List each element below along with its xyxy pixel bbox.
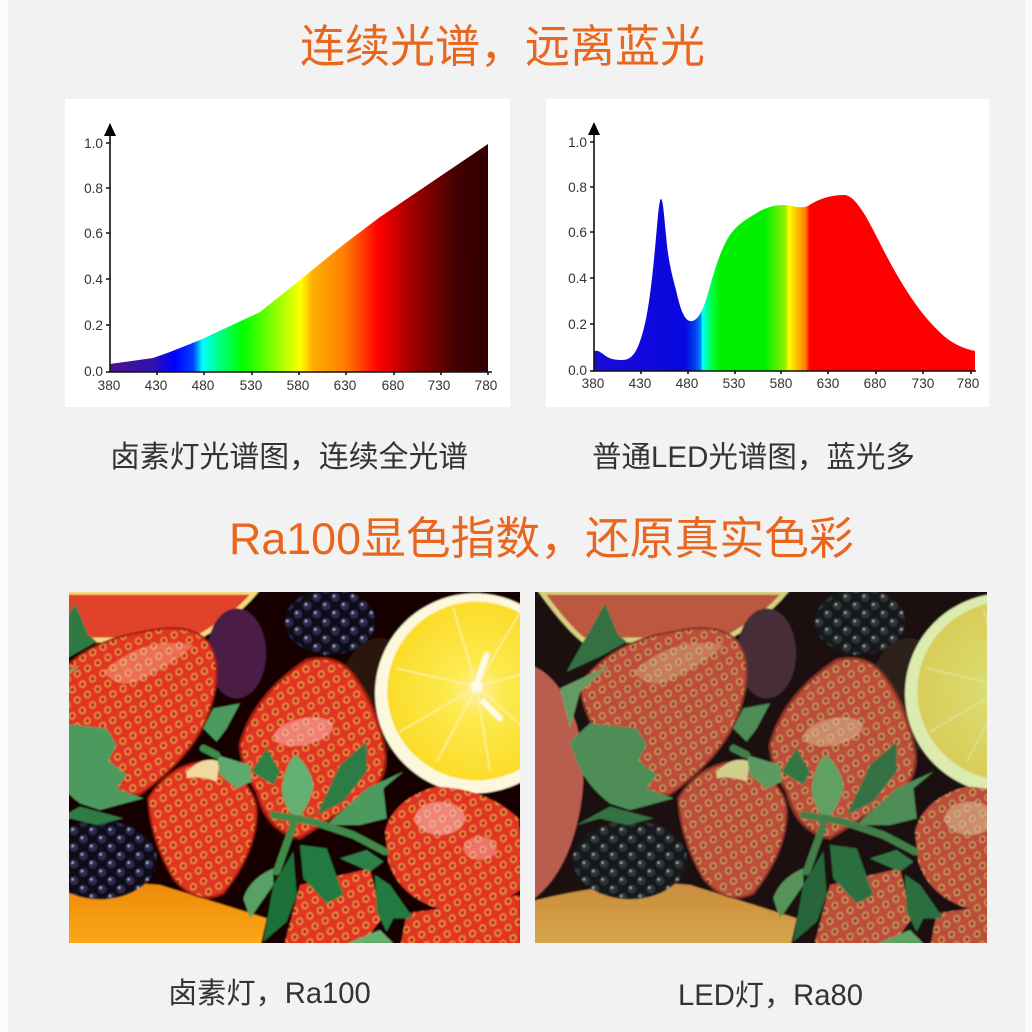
photo: LED lit fruit [535, 592, 987, 943]
y axis labels: 1.0 [568, 135, 587, 150]
x axis labels: 780 [957, 376, 980, 391]
LED spectrum area [594, 195, 975, 371]
plum [207, 608, 266, 698]
y axis labels: 0.8 [568, 180, 587, 195]
x axis labels: 680 [382, 378, 405, 393]
y axis labels: 0.6 [84, 226, 103, 241]
caption: halogen spectrum: 卤素灯光谱图，连续全光谱 [110, 441, 468, 474]
y axis labels: 1.0 [84, 136, 103, 151]
x axis labels: 530 [240, 378, 263, 393]
x axis labels [98, 378, 498, 393]
heading: Ra100 colour rendering: Ra100显色指数，还原真实色彩 [229, 514, 854, 564]
lemon [375, 593, 575, 793]
y axis labels: 0.4 [84, 272, 103, 287]
arrow: y axis [588, 122, 600, 135]
x axis labels: 630 [334, 378, 357, 393]
x axis labels: 430 [145, 378, 168, 393]
x axis labels: 580 [287, 378, 310, 393]
x axis labels: 580 [770, 376, 793, 391]
caption: LED Ra80: LED灯，Ra80 [678, 980, 863, 1012]
x axis labels: 730 [912, 376, 935, 391]
axes [106, 130, 492, 375]
axes [590, 128, 976, 374]
x axis labels: 680 [864, 376, 887, 391]
y axis labels: 0.0 [84, 364, 103, 379]
x axis labels: 480 [676, 376, 699, 391]
strawberry right [385, 787, 527, 910]
grapefruit [12, 592, 255, 640]
strawberry lower-right [283, 868, 382, 948]
x axis labels: 630 [817, 376, 840, 391]
panel: LED spectrum chart [546, 99, 989, 407]
y axis labels [84, 136, 103, 379]
caption: LED spectrum: 普通LED光谱图，蓝光多 [592, 441, 915, 474]
y axis labels: 0.4 [568, 271, 587, 286]
x axis labels: 480 [192, 378, 215, 393]
arrow: y axis [104, 123, 116, 136]
caption: halogen Ra100: 卤素灯，Ra100 [168, 978, 371, 1010]
strawberry center-lower [148, 761, 257, 898]
y axis labels [568, 135, 587, 378]
y axis labels: 0.6 [568, 225, 587, 240]
stems [203, 748, 385, 872]
y axis labels: 0.2 [568, 317, 587, 332]
blackberry top [285, 589, 375, 654]
y axis labels: 0.8 [84, 181, 103, 196]
x axis labels [582, 376, 980, 391]
y axis labels: 0.0 [568, 363, 587, 378]
apple [0, 665, 53, 902]
x axis labels: 430 [629, 376, 652, 391]
blackberry bottom [43, 821, 157, 899]
x axis labels: 530 [723, 376, 746, 391]
x axis labels: 780 [475, 378, 498, 393]
title: continuous spectrum: 连续光谱，远离蓝光 [300, 21, 705, 72]
x axis labels: 380 [98, 378, 121, 393]
strawberry big [50, 628, 217, 795]
x axis labels: 380 [582, 376, 605, 391]
leaves [30, 603, 413, 943]
orange base [0, 884, 267, 948]
panel: halogen spectrum chart [65, 99, 510, 407]
halogen spectrum area [110, 144, 488, 372]
x axis labels: 730 [428, 378, 451, 393]
strawberry mid [240, 658, 386, 838]
panel: fruit photos comparison [69, 592, 987, 943]
photo: halogen lit fruit [69, 592, 520, 943]
y axis labels: 0.2 [84, 318, 103, 333]
